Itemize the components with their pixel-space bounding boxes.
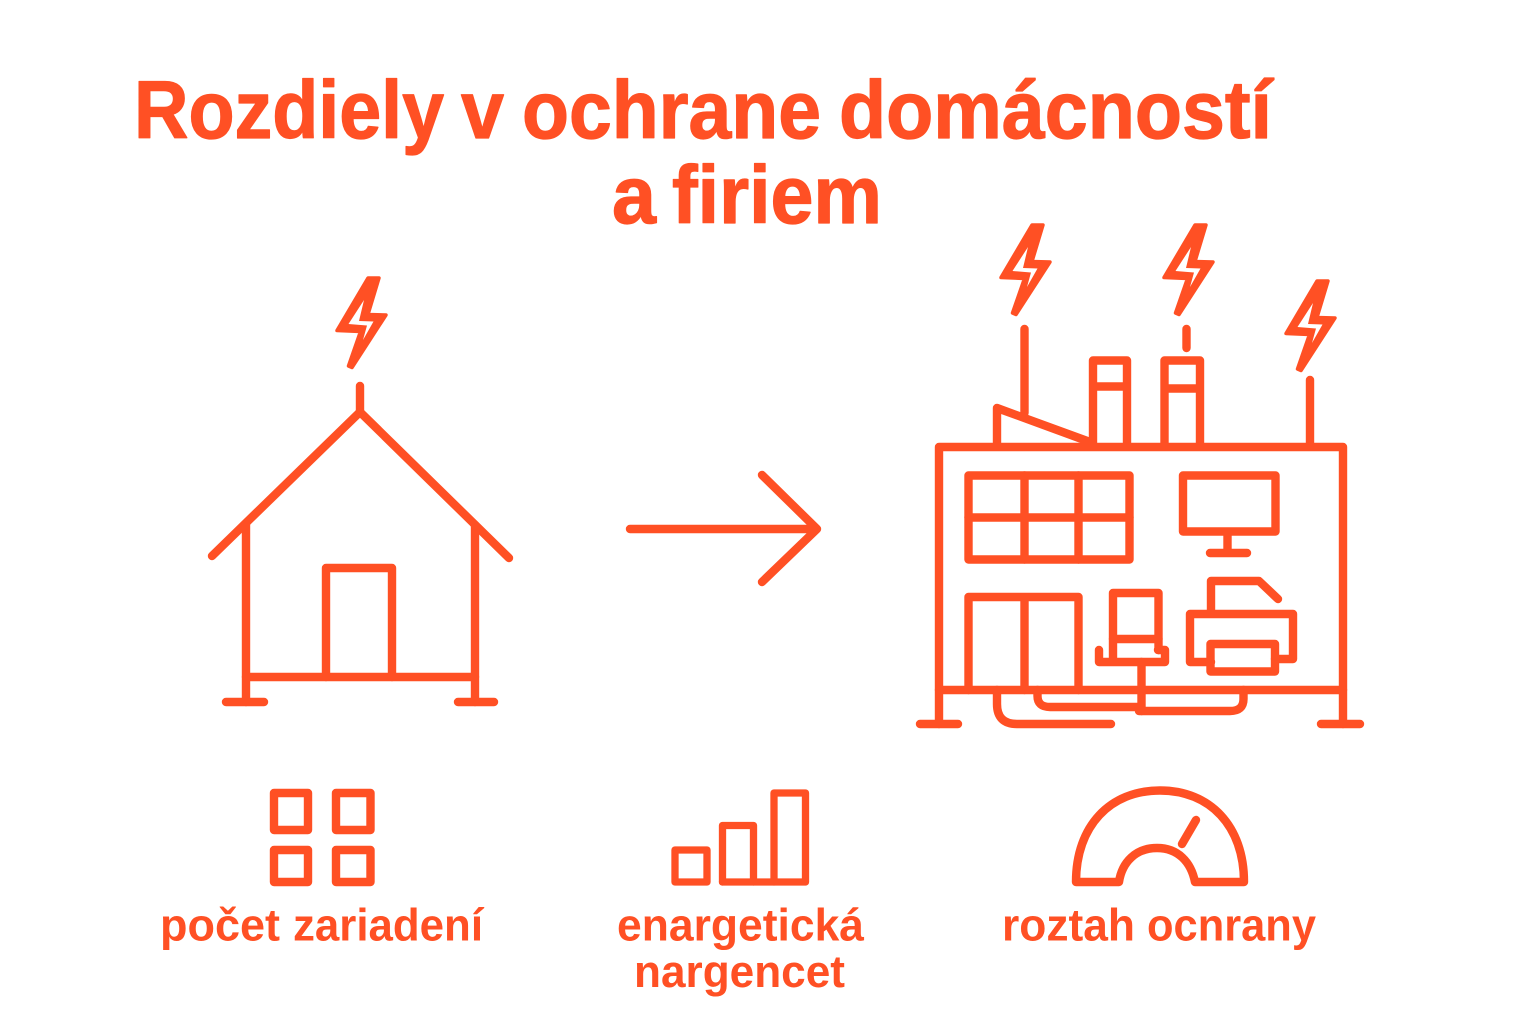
title: firiem xyxy=(672,150,882,241)
metric: protection range xyxy=(1002,790,1316,950)
cables under floor xyxy=(997,690,1244,724)
label: device count xyxy=(160,900,484,950)
title: domácností xyxy=(839,65,1274,156)
arrow from house to company xyxy=(630,475,817,582)
computer monitor xyxy=(1183,476,1276,553)
icon: four squares xyxy=(274,793,370,882)
icon: gauge xyxy=(1076,790,1244,882)
icon: lightning bolt above house xyxy=(337,278,386,368)
icon: bar chart xyxy=(675,793,806,882)
label: energy xyxy=(617,900,865,997)
roof equipment xyxy=(997,329,1310,446)
title xyxy=(134,65,1274,241)
label: device count: zariadení xyxy=(293,900,484,950)
icon: lightning bolt left xyxy=(1001,225,1050,314)
label: protection range: roztah xyxy=(1002,900,1135,950)
metric: device count xyxy=(160,793,484,950)
printer xyxy=(1190,581,1293,672)
title: a xyxy=(612,150,657,241)
icon: lightning bolt middle xyxy=(1164,225,1213,314)
illustration: house xyxy=(212,278,509,702)
label: device count: počet xyxy=(160,900,280,950)
title: Rozdiely xyxy=(134,65,444,156)
label: energy: nargencet xyxy=(634,946,845,997)
label: energy: enargetická xyxy=(617,900,865,950)
building frame xyxy=(920,447,1360,724)
title: ochrane xyxy=(522,65,821,156)
illustration: company building xyxy=(920,225,1360,724)
label: protection range: ocnrany xyxy=(1147,900,1316,950)
title: v xyxy=(461,65,504,156)
icon: lightning bolt right xyxy=(1286,281,1335,370)
label: protection range xyxy=(1002,900,1316,950)
window grid xyxy=(968,476,1130,560)
metric: energy xyxy=(617,793,865,997)
cabinet xyxy=(968,597,1078,690)
office chair xyxy=(1099,593,1165,711)
house outline xyxy=(212,386,509,702)
